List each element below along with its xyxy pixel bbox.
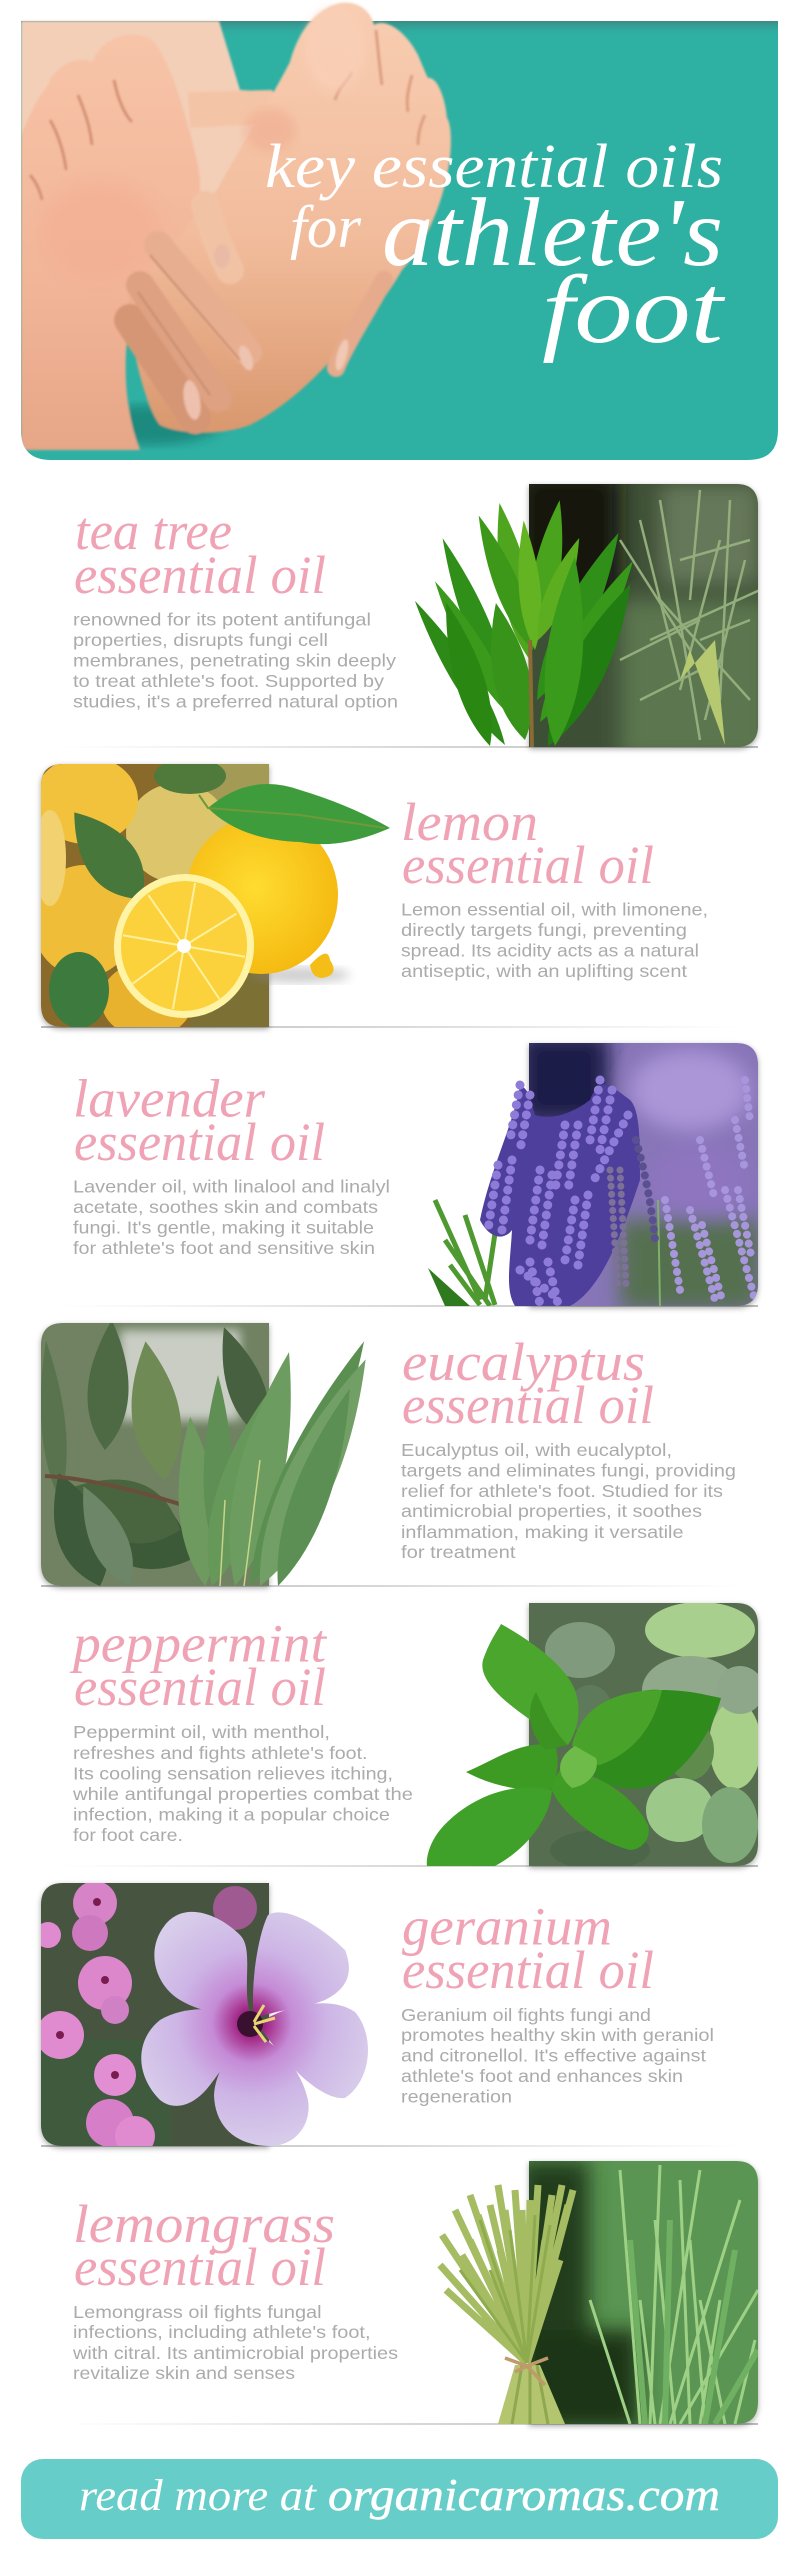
description	[401, 1440, 736, 1562]
heading: lemongrass	[73, 2194, 335, 2254]
plant: lavender spikes	[428, 1080, 655, 1306]
description: Eucalyptus oil, with eucalyptol,	[401, 1440, 672, 1460]
description: while antifungal properties combat the	[72, 1784, 413, 1804]
heading: essential oil	[402, 835, 654, 895]
right foot	[128, 3, 451, 432]
description: for athlete's foot and sensitive skin	[73, 1238, 375, 1258]
heading: essential oil	[402, 1375, 654, 1435]
description: with citral. Its antimicrobial properties	[72, 2343, 398, 2363]
description: fungi. It's gentle, making it suitable	[73, 1218, 374, 1238]
description: Geranium oil fights fungi and	[401, 2005, 651, 2025]
title: athlete's	[382, 179, 723, 287]
description: Its cooling sensation relieves itching,	[73, 1764, 393, 1784]
heading: tea tree	[75, 501, 232, 561]
description	[72, 1722, 413, 1845]
description: for foot care.	[73, 1825, 183, 1845]
description: relief for athlete's foot. Studied for its	[401, 1481, 723, 1501]
heading: peppermint	[69, 1614, 328, 1674]
heading	[402, 1896, 654, 2000]
plant: mint sprig	[427, 1624, 721, 1866]
photo: feet and hands	[21, 3, 451, 450]
photo: lemons	[32, 756, 269, 1038]
fingers	[205, 205, 230, 270]
teal background	[21, 21, 778, 460]
photo: pink geraniums	[35, 1881, 269, 2156]
panel: tea tree	[60, 474, 770, 760]
title: for	[290, 194, 362, 260]
description	[401, 2005, 714, 2107]
description: properties, disrupts fungi cell	[73, 630, 328, 650]
description: spread. Its acidity acts as a natural	[401, 940, 699, 960]
description: antimicrobial properties, it soothes	[401, 1501, 702, 1521]
description	[73, 610, 398, 712]
heading: lemon	[401, 792, 538, 852]
panel: lavender	[60, 1033, 760, 1310]
plant: lemongrass bundle	[440, 2185, 573, 2424]
description: renowned for its potent antifungal	[73, 610, 371, 630]
panel: lemon	[32, 756, 741, 1038]
description: promotes healthy skin with geraniol	[401, 2025, 714, 2045]
plant: tea tree sprig	[415, 500, 633, 747]
title: foot	[542, 256, 726, 364]
description: athlete's foot and enhances skin	[401, 2066, 683, 2086]
description: infection, making it a popular choice	[73, 1804, 390, 1824]
footer text	[79, 2469, 720, 2520]
heading: essential oil	[74, 2237, 326, 2297]
description: directly targets fungi, preventing	[401, 920, 687, 940]
heading: essential oil	[74, 1657, 326, 1717]
description: inflammation, making it versatile	[401, 1522, 684, 1542]
heading	[69, 1614, 328, 1717]
panel: peppermint	[60, 1602, 764, 1870]
heading	[73, 2194, 335, 2297]
description: revitalize skin and senses	[73, 2363, 295, 2383]
footer text: organicaromas.com	[328, 2469, 720, 2520]
photo: mint plants	[529, 1602, 764, 1870]
description: membranes, penetrating skin deeply	[73, 651, 396, 671]
description	[401, 900, 708, 981]
heading: essential oil	[74, 545, 326, 605]
heading: eucalyptus	[402, 1332, 645, 1392]
description: Peppermint oil, with menthol,	[73, 1722, 330, 1742]
photo: lavender field	[519, 1033, 760, 1310]
photo: eucalyptus branches	[34, 1319, 282, 1594]
panel: eucalyptus	[34, 1319, 741, 1596]
photo: lemongrass plants	[519, 2161, 758, 2430]
description: Lavender oil, with linalool and linalyl	[73, 1176, 390, 1196]
description: Lemon essential oil, with limonene,	[401, 900, 708, 920]
heading	[73, 1068, 325, 1172]
heading: geranium	[402, 1896, 612, 1956]
left foot	[21, 34, 200, 450]
panel: lemongrass	[60, 2161, 758, 2430]
heading: lavender	[73, 1068, 266, 1128]
heading: essential oil	[402, 1940, 654, 2000]
heading	[74, 501, 326, 605]
photo: tea tree bush	[526, 482, 762, 752]
description: infections, including athlete's foot,	[73, 2322, 370, 2342]
heading	[401, 792, 654, 895]
description: acetate, soothes skin and combats	[73, 1197, 378, 1217]
description	[73, 1176, 390, 1258]
panel: geranium	[35, 1881, 741, 2156]
title: key essential oils	[265, 133, 723, 201]
footer banner	[21, 2459, 778, 2539]
description: regeneration	[401, 2087, 512, 2107]
description: for treatment	[401, 1542, 516, 1562]
description: refreshes and fights athlete's foot.	[73, 1743, 368, 1763]
plant: geranium flower	[141, 1912, 368, 2146]
description: antiseptic, with an uplifting scent	[401, 961, 687, 981]
description: to treat athlete's foot. Supported by	[73, 671, 384, 691]
description	[72, 2302, 398, 2383]
heading: essential oil	[74, 1112, 325, 1172]
description: studies, it's a preferred natural option	[73, 692, 398, 712]
heading	[402, 1332, 654, 1435]
title	[265, 133, 726, 364]
description: and citronellol. It's effective against	[401, 2046, 706, 2066]
plant: lemon with leaf	[103, 784, 390, 1029]
description: Lemongrass oil fights fungal	[73, 2302, 322, 2322]
header banner	[21, 3, 778, 460]
plant: eucalyptus leaves	[178, 1341, 366, 1586]
lemon half	[103, 863, 265, 1029]
description: targets and eliminates fungi, providing	[401, 1460, 736, 1480]
footer text: read more at	[79, 2471, 318, 2520]
